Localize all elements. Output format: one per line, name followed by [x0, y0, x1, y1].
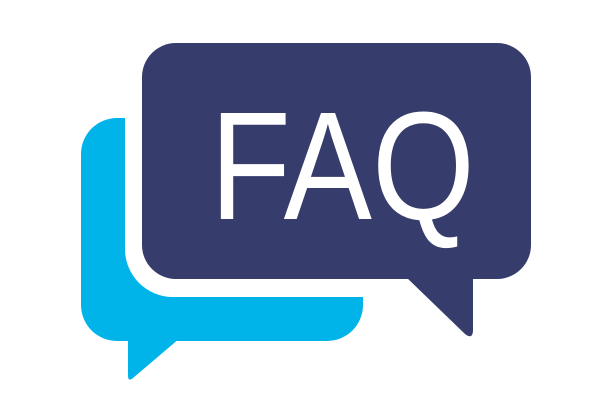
icon: blue speech bubble (back) — [81, 118, 363, 380]
icon: dark speech bubble (front) — [142, 43, 531, 336]
title: FAQ: FAQ — [210, 80, 475, 252]
